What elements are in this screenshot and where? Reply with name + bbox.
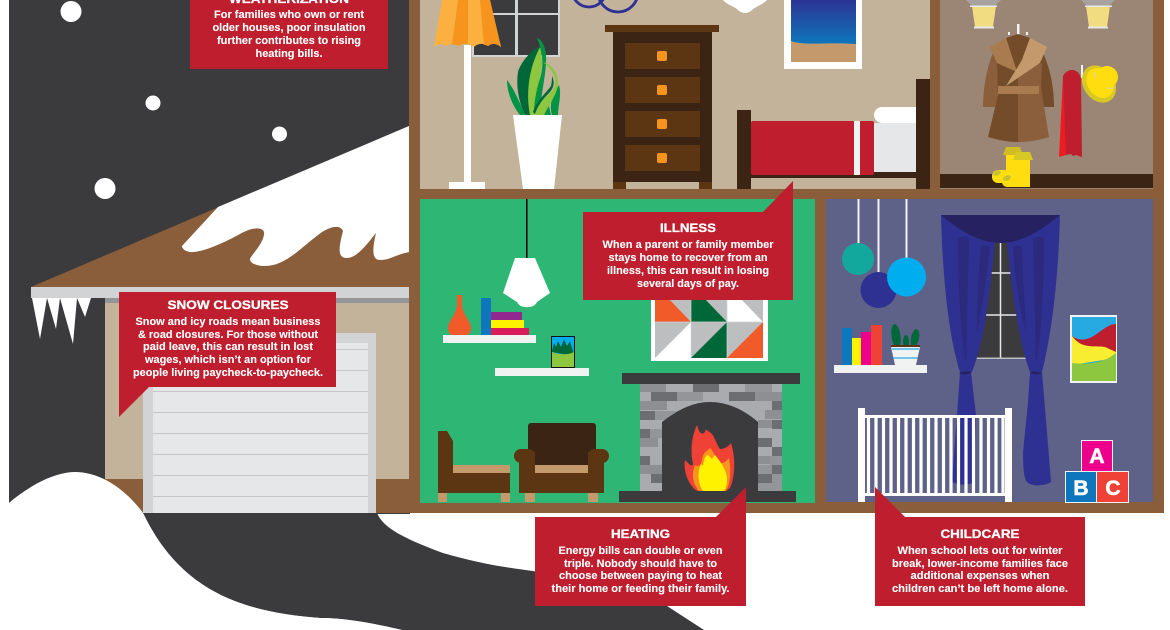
side chair	[438, 431, 510, 502]
callout: illness	[583, 181, 793, 300]
geometric art	[651, 298, 768, 361]
room: nursery	[826, 199, 1153, 502]
wall ring decoration	[572, 0, 638, 12]
ceiling light right	[1081, 0, 1115, 28]
armchair	[514, 423, 609, 502]
ceiling light left	[966, 0, 1001, 28]
potted plant	[507, 38, 562, 189]
callout: childcare: children can’t be left home alone.	[892, 583, 1068, 595]
callout: weatherization: heating bills.	[256, 48, 323, 60]
callout: heating: triple. Nobody should have to	[564, 558, 718, 570]
callout: snow closures: people living paycheck-to-paycheck.	[133, 367, 323, 379]
room: closet	[940, 0, 1153, 189]
floor lamp	[434, 0, 501, 189]
room: living room	[420, 199, 815, 503]
callout: snow closures: paid leave, this can result in lost	[143, 341, 313, 353]
lower shelf	[495, 336, 589, 376]
alphabet blocks: A	[1089, 445, 1105, 468]
yellow hat	[1075, 59, 1123, 109]
callout: heating: their home or feeding their family.	[552, 583, 730, 595]
callout: childcare: break, lower-income families face	[892, 558, 1068, 570]
callout: illness: illness, this can result in losing	[607, 265, 769, 277]
fireplace	[619, 373, 800, 502]
coat	[983, 24, 1054, 142]
snowy road and ground	[0, 472, 704, 630]
callout: weatherization: further contributes to rising	[217, 35, 361, 47]
roof snow	[182, 126, 409, 266]
nursery window	[976, 240, 1026, 359]
hanging ball mobiles	[842, 199, 926, 308]
callout: childcare	[875, 487, 1085, 606]
callout: heating: Energy bills can double or even	[558, 545, 722, 557]
small potted plant	[890, 323, 921, 365]
house frame	[409, 0, 1164, 513]
garage wall	[105, 298, 409, 479]
callout: weatherization: older houses, poor insulation	[212, 22, 366, 34]
upper shelf	[443, 295, 536, 343]
callout: illness: stays home to recover from an	[608, 252, 768, 264]
callout: weatherization	[190, 0, 388, 69]
bed	[737, 79, 930, 189]
beach picture	[784, 0, 862, 69]
abstract picture	[1070, 315, 1117, 383]
callout: heating: HEATING	[611, 527, 670, 541]
icicles	[32, 298, 91, 344]
small forest picture	[551, 336, 575, 368]
hearth base	[619, 491, 796, 502]
garage roof	[31, 126, 409, 287]
vase	[448, 295, 471, 335]
scarf	[1059, 65, 1083, 157]
callout: snow closures: wages, which isn’t an option for	[144, 354, 311, 366]
callout: illness: When a parent or family member	[602, 239, 774, 251]
bedroom window	[472, 0, 560, 57]
callout: snow closures: & road closures. For those without	[138, 329, 318, 341]
mantel	[622, 373, 800, 384]
callout: weatherization: For families who own or rent	[214, 9, 364, 21]
snowflakes	[60, 1, 287, 199]
curtains	[941, 215, 1060, 485]
hearth opening	[662, 402, 758, 491]
garage door	[143, 333, 376, 513]
callout: illness: several days of pay.	[637, 278, 739, 290]
callout: snow closures: Snow and icy roads mean business	[136, 316, 321, 328]
garage	[31, 126, 409, 513]
alphabet blocks: B	[1073, 477, 1089, 500]
fire	[685, 425, 734, 491]
callout: snow closures	[119, 292, 336, 417]
nursery shelf	[834, 323, 927, 373]
callout: heating	[535, 487, 746, 606]
ceiling lamp	[723, 0, 767, 13]
stacked books	[481, 298, 529, 335]
alphabet blocks: C	[1105, 477, 1121, 500]
rain boots	[992, 147, 1033, 187]
callout: childcare: When school lets out for winter	[898, 545, 1062, 557]
room: bedroom	[420, 0, 930, 189]
callout: childcare: CHILDCARE	[940, 527, 1020, 541]
dresser	[605, 25, 719, 189]
night sky background	[9, 0, 410, 514]
callout: childcare: additional expenses when	[910, 570, 1050, 582]
crib	[858, 408, 1012, 502]
pendant lamp	[503, 199, 550, 307]
alphabet blocks	[1066, 440, 1128, 502]
gutter	[31, 287, 409, 298]
callout: snow closures: SNOW CLOSURES	[168, 298, 288, 312]
callout: illness: ILLNESS	[660, 221, 716, 235]
callout: heating: choose between paying to heat	[559, 570, 722, 582]
